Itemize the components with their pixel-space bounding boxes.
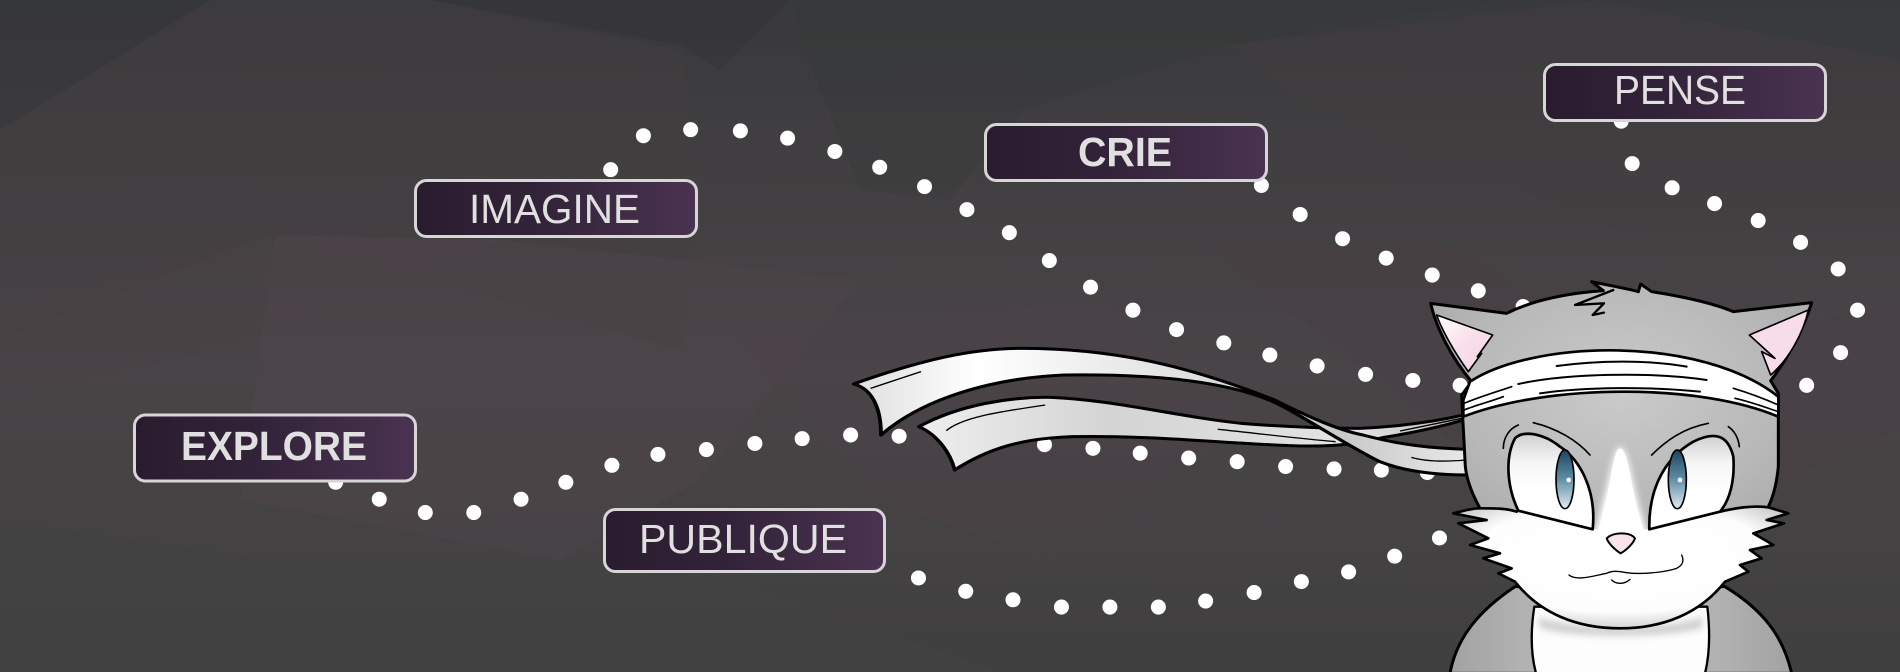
label: CRIE [986, 124, 1266, 180]
dots: explore to think path [328, 427, 1435, 520]
label: PUBLIQUE: PUBLIQUE [639, 516, 847, 562]
cat nose [1607, 533, 1635, 553]
dots: publish path [911, 530, 1447, 615]
cat chest [1532, 607, 1709, 672]
cat left eye [1508, 434, 1593, 529]
headband ribbon tails [854, 348, 1468, 475]
head tuft [1575, 290, 1613, 315]
cheek fluff outline [1453, 507, 1788, 628]
label: IMAGINE: IMAGINE [469, 186, 640, 232]
ribbon: upper tail [854, 348, 1468, 475]
ribbon: lower tail [919, 397, 1464, 470]
chin shadow on chest [1538, 617, 1703, 636]
cat head [1431, 282, 1812, 560]
cat ear inner right [1749, 310, 1808, 375]
label: PENSE [1544, 64, 1826, 120]
headband [1463, 350, 1778, 417]
cat right eye [1649, 436, 1734, 529]
dotted path connecting the steps [328, 114, 1865, 615]
dots: think path [1614, 114, 1865, 393]
cat forehead blaze [1594, 447, 1648, 537]
ribbon crease lines [871, 372, 1466, 461]
label: EXPLORE [134, 415, 416, 481]
label: EXPLORE: EXPLORE [181, 423, 367, 469]
blaze core [1597, 448, 1645, 535]
cat body [1450, 587, 1792, 672]
cat eyebrows [1503, 423, 1739, 455]
cat character with headband [1431, 282, 1812, 672]
cat ear inner left [1437, 315, 1493, 372]
label: PENSE: PENSE [1614, 67, 1746, 113]
cat mouth [1569, 555, 1683, 583]
label: CRIE: CRIE [1078, 129, 1172, 175]
label: IMAGINE [416, 180, 696, 236]
dots: imagine path [603, 122, 1468, 393]
label: PUBLIQUE [604, 510, 884, 572]
dots: create path [1254, 178, 1531, 314]
cat muzzle and cheek fluff [1453, 507, 1788, 628]
